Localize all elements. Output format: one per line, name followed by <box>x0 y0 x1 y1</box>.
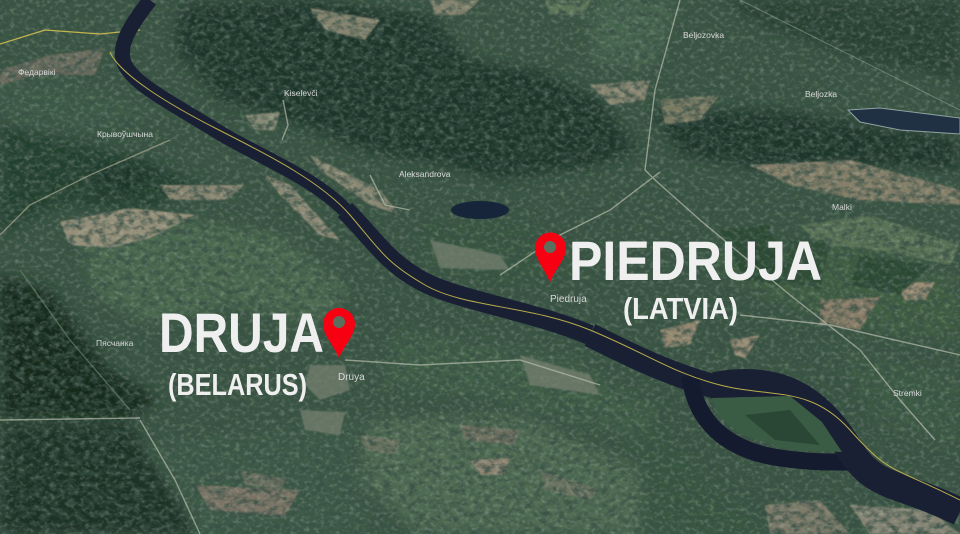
island <box>712 396 842 452</box>
place labels: Крывоўшчына <box>97 129 153 139</box>
border line top left <box>0 30 140 44</box>
lake: upper right <box>848 108 960 134</box>
place labels: Druya <box>338 372 365 383</box>
label: Druja (Belarus): (BELARUS) <box>168 367 307 402</box>
icon: map pin Druja <box>323 308 355 358</box>
place labels: Пясчанка <box>96 338 134 348</box>
place labels: Kiselevči <box>284 88 318 98</box>
town clusters <box>300 240 600 435</box>
place labels: Beljozovka <box>683 30 724 40</box>
lake: Aleksandrova <box>451 201 509 219</box>
label: Piedruja (Latvia): (LATVIA) <box>623 291 738 326</box>
border line along river <box>110 52 960 500</box>
label: Druja (Belarus) <box>159 301 324 402</box>
label: Piedruja (Latvia): PIEDRUJA <box>569 229 822 292</box>
label: Druja (Belarus): DRUJA <box>159 301 324 364</box>
place labels <box>18 30 922 398</box>
place labels: Piedruja <box>550 294 587 305</box>
place labels: Федарвікі <box>18 67 56 77</box>
place labels: Stremki <box>893 388 922 398</box>
place labels: Beljozka <box>805 89 837 99</box>
label: Piedruja (Latvia) <box>569 229 822 326</box>
place labels: Malki <box>832 202 852 212</box>
icon: map pin Piedruja <box>535 232 566 282</box>
place labels: Aleksandrova <box>399 169 451 179</box>
